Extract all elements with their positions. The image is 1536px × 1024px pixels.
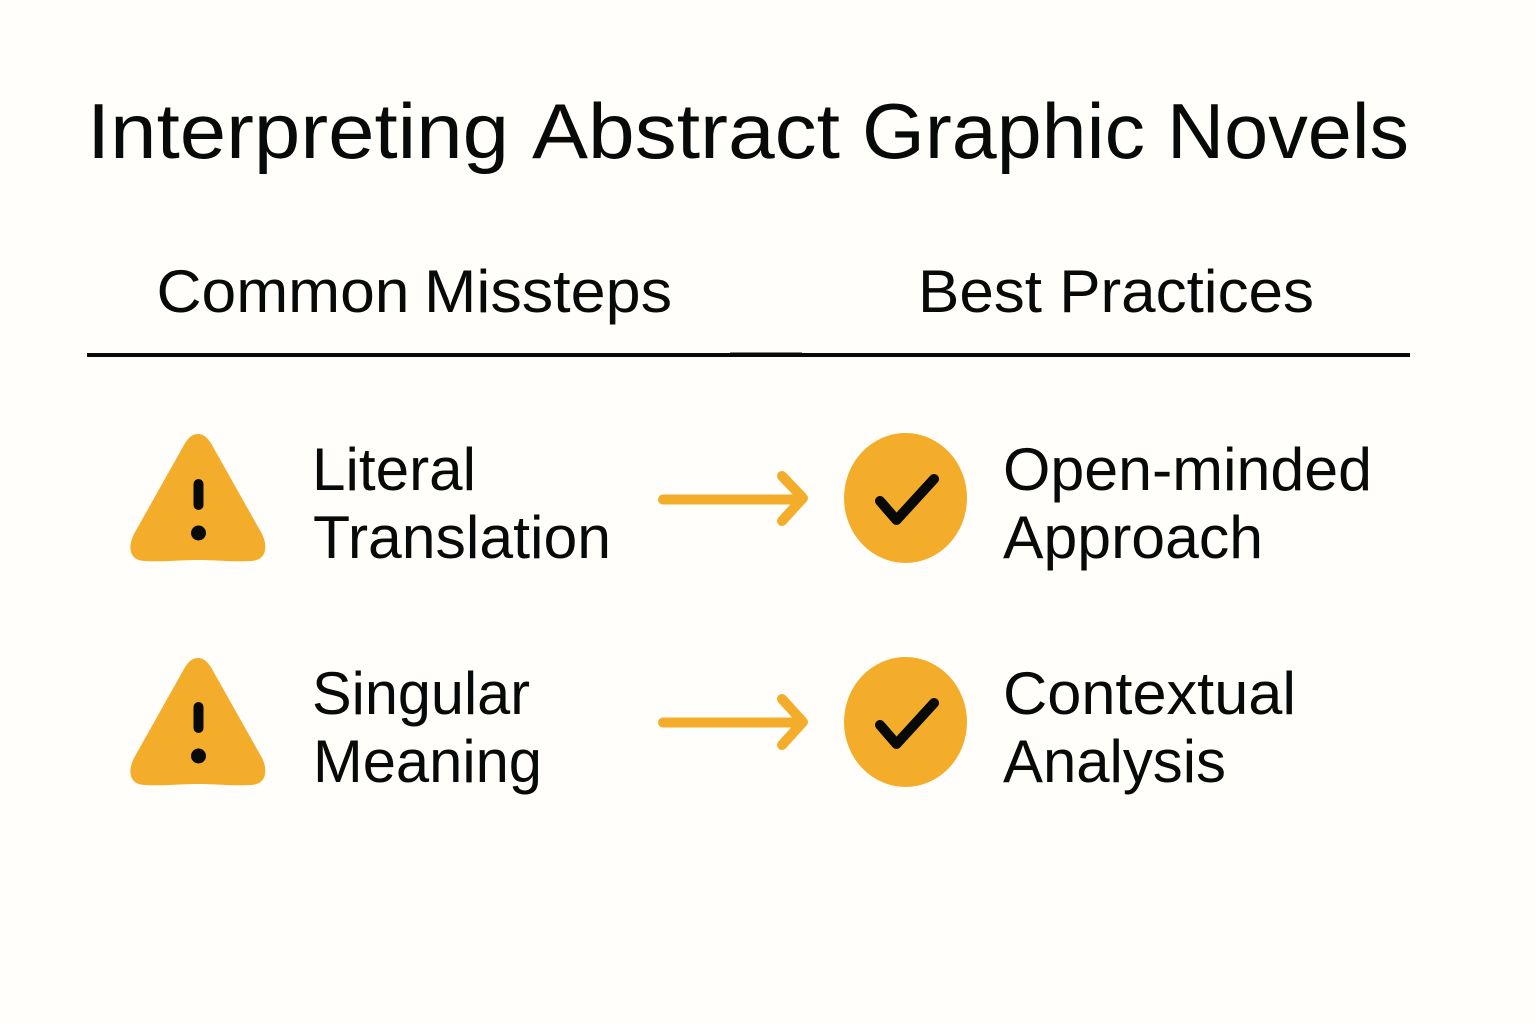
title: Abstract	[532, 87, 840, 175]
text: literal translation: Translation	[313, 504, 611, 571]
text: singular meaning: Meaning	[313, 728, 542, 795]
text: singular meaning: Singular	[312, 660, 530, 727]
heading: common missteps: Missteps	[424, 258, 672, 325]
icon: warning triangle	[130, 434, 265, 561]
text: contextual analysis: Contextual	[1003, 660, 1296, 727]
text: open-minded approach: Open-minded	[1003, 436, 1372, 503]
title: Interpreting	[87, 87, 509, 175]
title: Novels	[1167, 87, 1409, 175]
heading: best practices: Best Practices	[918, 258, 1314, 325]
text: literal translation: Literal	[312, 436, 476, 503]
heading: common missteps: Common	[156, 258, 410, 325]
icon: warning triangle	[130, 658, 265, 785]
arrow	[663, 476, 803, 521]
icon: check circle	[844, 433, 967, 563]
row 1: literal translation to open-minded approach	[130, 433, 1372, 571]
arrow	[663, 699, 803, 745]
title: Graphic	[862, 87, 1145, 175]
text: open-minded approach: Approach	[1003, 504, 1263, 571]
text: contextual analysis: Analysis	[1003, 728, 1226, 795]
row 2: singular meaning to contextual analysis	[130, 657, 1296, 795]
icon: check circle	[844, 657, 967, 787]
